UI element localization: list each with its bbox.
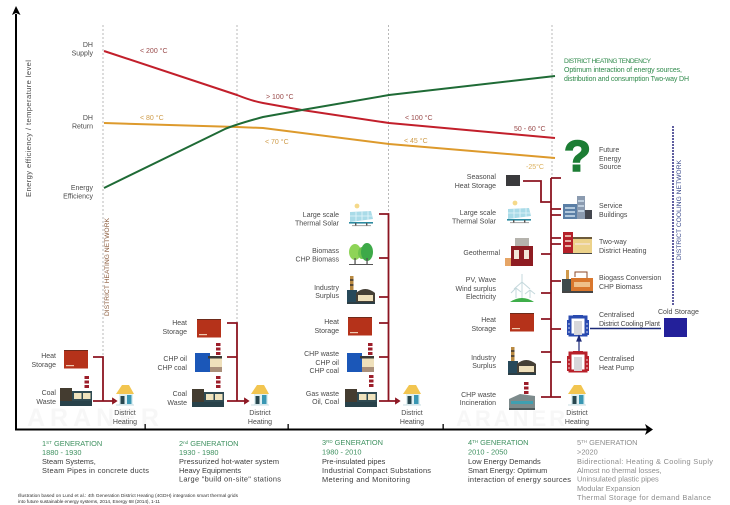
source labels: Surplus bbox=[472, 363, 496, 370]
consumer labels: District Cooling Plant bbox=[599, 321, 660, 328]
icon: house bbox=[403, 385, 421, 406]
source labels: Heat bbox=[41, 353, 56, 360]
consumer labels: Future bbox=[599, 147, 619, 154]
source labels: Gas waste bbox=[306, 391, 339, 398]
icon: heat storage bbox=[510, 313, 534, 332]
source labels: CHP oil bbox=[315, 360, 339, 367]
text: 4th generation: GENERATION bbox=[478, 438, 528, 447]
source labels: Large scale bbox=[303, 212, 339, 219]
vertical axis bbox=[12, 6, 20, 430]
text: 2nd generation bbox=[179, 439, 281, 484]
icon: thermal solar bbox=[507, 201, 531, 223]
source labels: Heating bbox=[113, 419, 137, 426]
district heating tendency: Optimum interaction of energy sources, bbox=[564, 67, 682, 74]
source labels: Coal bbox=[173, 391, 187, 398]
watermark bbox=[27, 404, 568, 432]
consumer labels: Service bbox=[599, 203, 622, 210]
consumer labels: Two-way bbox=[599, 239, 627, 246]
curve labels left bbox=[63, 42, 93, 200]
source labels: Waste bbox=[36, 399, 56, 406]
text: 3rd generation: GENERATION bbox=[333, 438, 383, 447]
icon: two-way heating bbox=[563, 232, 592, 254]
text: 3rd generation: Metering and Monitoring bbox=[322, 475, 410, 484]
source labels: District bbox=[401, 410, 423, 417]
source labels: CHP waste bbox=[461, 392, 496, 399]
text: 5th generation bbox=[577, 438, 713, 502]
source labels bbox=[295, 212, 424, 426]
source labels: Storage bbox=[471, 326, 496, 333]
source labels: Thermal Solar bbox=[452, 218, 497, 226]
consumer labels: Source bbox=[599, 164, 621, 171]
consumer labels: Biogass Conversion bbox=[599, 275, 661, 282]
panel: 3rd generation bbox=[295, 204, 424, 426]
text: 5th generation: Bidirectional: Heating & Cooling Suply bbox=[577, 457, 713, 466]
source labels: District bbox=[114, 410, 136, 417]
source labels: CHP waste bbox=[304, 351, 339, 358]
icon: cold storage bbox=[664, 318, 687, 337]
source labels: Heating bbox=[400, 419, 424, 426]
consumer labels: Centralised bbox=[599, 312, 635, 319]
curve labels left: Return bbox=[72, 124, 93, 130]
source labels: Waste bbox=[167, 400, 187, 407]
source labels: Surplus bbox=[315, 293, 340, 300]
source labels: Wind surplus bbox=[456, 286, 496, 293]
text: 3rd generation: Industrial Compact Substations bbox=[322, 466, 431, 475]
icon: centralised cooling plant bbox=[567, 315, 589, 335]
source labels: Storage bbox=[162, 329, 187, 336]
district heating tendency: distribution and consumption Two-way DH bbox=[564, 76, 689, 83]
return temperature labels: < 45 °C bbox=[404, 137, 428, 145]
icon: house bbox=[116, 385, 134, 406]
source labels: Heat Storage bbox=[455, 183, 496, 190]
icon: geothermal bbox=[505, 238, 533, 266]
source labels: District bbox=[249, 410, 271, 417]
source labels: Heat bbox=[481, 317, 496, 324]
source labels: Oil, Coal bbox=[312, 399, 339, 406]
consumer labels: Heat Pump bbox=[599, 365, 634, 372]
icon: future energy question mark: ? bbox=[564, 132, 591, 181]
panel: 2nd generation bbox=[158, 319, 272, 426]
icon: biogas conversion bbox=[562, 270, 593, 293]
text: 1st generation: GENERATION bbox=[52, 439, 102, 448]
icon: heat storage bbox=[64, 350, 88, 368]
source labels: District bbox=[566, 410, 588, 417]
icon: heat storage bbox=[197, 319, 221, 338]
icon: industry bbox=[347, 276, 375, 304]
text: 2nd generation: Pressurized hot-water system bbox=[179, 457, 279, 466]
source labels: Electricity bbox=[466, 294, 496, 301]
text: 3rd generation: 1980 - 2010 bbox=[322, 448, 361, 456]
curve labels left: Efficiency bbox=[63, 194, 93, 200]
source labels bbox=[452, 174, 589, 426]
line: DH return temperature bbox=[104, 123, 555, 158]
network lines bbox=[379, 214, 399, 403]
text: 2nd generation: 2 bbox=[179, 439, 183, 448]
icon: CHP waste incineration bbox=[509, 382, 535, 410]
source labels: CHP coal bbox=[158, 365, 187, 372]
consumer labels bbox=[599, 147, 661, 372]
icon: gas waste plant bbox=[345, 375, 377, 407]
watermark: ARANER bbox=[456, 406, 568, 431]
text: 4th generation: 2010 - 2050 bbox=[468, 448, 507, 456]
network lines bbox=[93, 357, 116, 403]
text: 5th generation: TH bbox=[581, 439, 587, 444]
line: DH supply temperature bbox=[104, 51, 555, 138]
consumer labels: Centralised bbox=[599, 356, 635, 363]
source labels: PV, Wave bbox=[466, 277, 496, 284]
supply temperature labels: < 200 °C bbox=[140, 47, 168, 55]
text: 3rd generation: Pre-insulated pipes bbox=[322, 457, 386, 466]
source note: Illustration based on Lund et al.: 4th Generation District Heating (4GDH) integration smart thermal grids bbox=[18, 493, 239, 499]
icon: CHP plant bbox=[195, 343, 222, 372]
icon: service buildings bbox=[563, 196, 592, 219]
return temperature labels: < 80 °C bbox=[140, 114, 164, 122]
network lines bbox=[523, 178, 561, 397]
text: 4th generation: 4 bbox=[468, 438, 472, 447]
source labels: Storage bbox=[31, 362, 56, 369]
text: 1st generation: Steam Systems, bbox=[42, 457, 96, 466]
return temperature labels: -25°C bbox=[526, 163, 544, 171]
text: 2nd generation: Large "build on-site" stations bbox=[179, 474, 281, 484]
consumer labels: Energy bbox=[599, 156, 622, 163]
supply temperature labels: 50 - 60 °C bbox=[514, 125, 546, 133]
source labels: Thermal Solar bbox=[295, 220, 340, 228]
supply temperature labels bbox=[140, 47, 546, 133]
source labels: Geothermal bbox=[463, 250, 500, 257]
text: 5th generation: GENERATION bbox=[587, 438, 638, 447]
source labels: Incineration bbox=[460, 400, 496, 407]
text: 4th generation: Smart Energy: Optimum bbox=[468, 466, 547, 475]
district cooling network label: DISTRICT COOLING NETWORK bbox=[676, 159, 683, 260]
cooling line bbox=[590, 328, 661, 330]
source note bbox=[18, 493, 239, 505]
label: cold storage: Cold Storage bbox=[658, 309, 699, 316]
network lines bbox=[227, 323, 248, 403]
district cooling dashed line bbox=[672, 126, 674, 305]
source labels bbox=[158, 320, 272, 426]
text: 5th generation: Modular Expansion bbox=[577, 484, 640, 493]
text: 4th generation bbox=[468, 438, 571, 484]
icon: house bbox=[251, 385, 269, 406]
curve labels left: DH bbox=[83, 115, 93, 122]
source labels bbox=[31, 353, 137, 426]
curve labels left: Energy bbox=[71, 185, 93, 192]
text: 2nd generation: nd bbox=[183, 440, 189, 445]
icon: centralised heat pump bbox=[567, 351, 589, 371]
text: 4th generation: interaction of energy sources bbox=[468, 475, 571, 484]
district heating tendency bbox=[564, 58, 689, 83]
consumer labels: Buildings bbox=[599, 212, 628, 219]
text: 3rd generation: 3 bbox=[322, 438, 326, 447]
horizontal axis bbox=[15, 424, 653, 435]
text: 1st generation bbox=[42, 439, 149, 475]
icon: wind turbines bbox=[510, 274, 535, 302]
text: 5th generation: Uninsulated plastic pipes bbox=[577, 474, 659, 484]
text: 1st generation: ST bbox=[46, 440, 52, 445]
watermark: ARANER bbox=[27, 404, 164, 432]
text: 5th generation: Almost no thermal losses, bbox=[577, 466, 662, 475]
source note: into future sustainable energy systems, 2014, Energy 68 (2014), 1-11 bbox=[18, 499, 160, 505]
icon: heat storage bbox=[348, 317, 372, 336]
text: 5th generation: 5 bbox=[577, 438, 581, 447]
source labels: Heating bbox=[248, 419, 272, 426]
text: 5th generation: Thermal Storage for demand Balance bbox=[577, 493, 711, 502]
source labels: Industry bbox=[471, 355, 496, 362]
line: energy efficiency bbox=[104, 76, 555, 188]
source labels: Industry bbox=[314, 285, 339, 292]
district heating network label: DISTRICT HEATING NETWORK bbox=[104, 217, 111, 316]
text: 4th generation: TH bbox=[472, 439, 478, 444]
icon: coal waste plant bbox=[192, 376, 224, 407]
icon: biomass bbox=[349, 243, 373, 265]
text: 1st generation: 1 bbox=[42, 439, 46, 448]
source labels: Heating bbox=[565, 419, 589, 426]
y axis title: Energy efficiency / temperature level bbox=[24, 60, 33, 197]
source labels: Biomass bbox=[312, 248, 339, 255]
supply temperature labels: < 100 °C bbox=[405, 114, 433, 122]
return temperature labels bbox=[140, 114, 544, 171]
source labels: CHP oil bbox=[163, 356, 187, 363]
icon: coal waste plant bbox=[60, 376, 92, 406]
source labels: Seasonal bbox=[467, 174, 496, 181]
source labels: Coal bbox=[42, 390, 56, 397]
text: 3rd generation: RD bbox=[326, 439, 333, 444]
text: 2nd generation: Heavy Equipments bbox=[179, 466, 241, 475]
panel: 1st generation bbox=[31, 350, 137, 426]
icon: CHP plant bbox=[347, 343, 374, 372]
icon: house bbox=[568, 385, 586, 406]
panel: 5th generation consumers bbox=[562, 132, 699, 372]
icon: industry bbox=[508, 347, 536, 375]
text: 2nd generation: 1930 - 1980 bbox=[179, 448, 218, 457]
panel: 4th generation bbox=[452, 174, 589, 426]
curve labels left: Supply bbox=[72, 50, 93, 58]
text: 1st generation: Steam Pipes in concrete ducts bbox=[42, 466, 149, 475]
curve labels left: DH bbox=[83, 42, 93, 49]
text: 3rd generation bbox=[322, 438, 431, 484]
icon: thermal solar bbox=[349, 204, 373, 226]
source labels: CHP coal bbox=[310, 368, 339, 375]
text: 1st generation: 1880 - 1930 bbox=[42, 448, 81, 457]
consumer labels: CHP Biomass bbox=[599, 284, 643, 291]
district heating tendency: DISTRICT HEATING TENDENCY bbox=[564, 58, 652, 65]
supply temperature labels: > 100 °C bbox=[266, 93, 294, 101]
text: 5th generation: >2020 bbox=[577, 448, 598, 456]
text: 4th generation: Low Energy Demands bbox=[468, 457, 541, 466]
source labels: Heat bbox=[172, 320, 187, 327]
source labels: Storage bbox=[314, 328, 339, 335]
source labels: Large scale bbox=[460, 210, 496, 217]
source labels: CHP Biomass bbox=[296, 256, 339, 264]
consumer labels: District Heating bbox=[599, 248, 647, 255]
return temperature labels: < 70 °C bbox=[265, 138, 289, 146]
text: 2nd generation: GENERATION bbox=[188, 439, 239, 448]
icon: seasonal storage bbox=[506, 175, 520, 186]
arrow: heat pump to cooling plant bbox=[577, 336, 581, 351]
source labels: Heat bbox=[324, 319, 339, 326]
